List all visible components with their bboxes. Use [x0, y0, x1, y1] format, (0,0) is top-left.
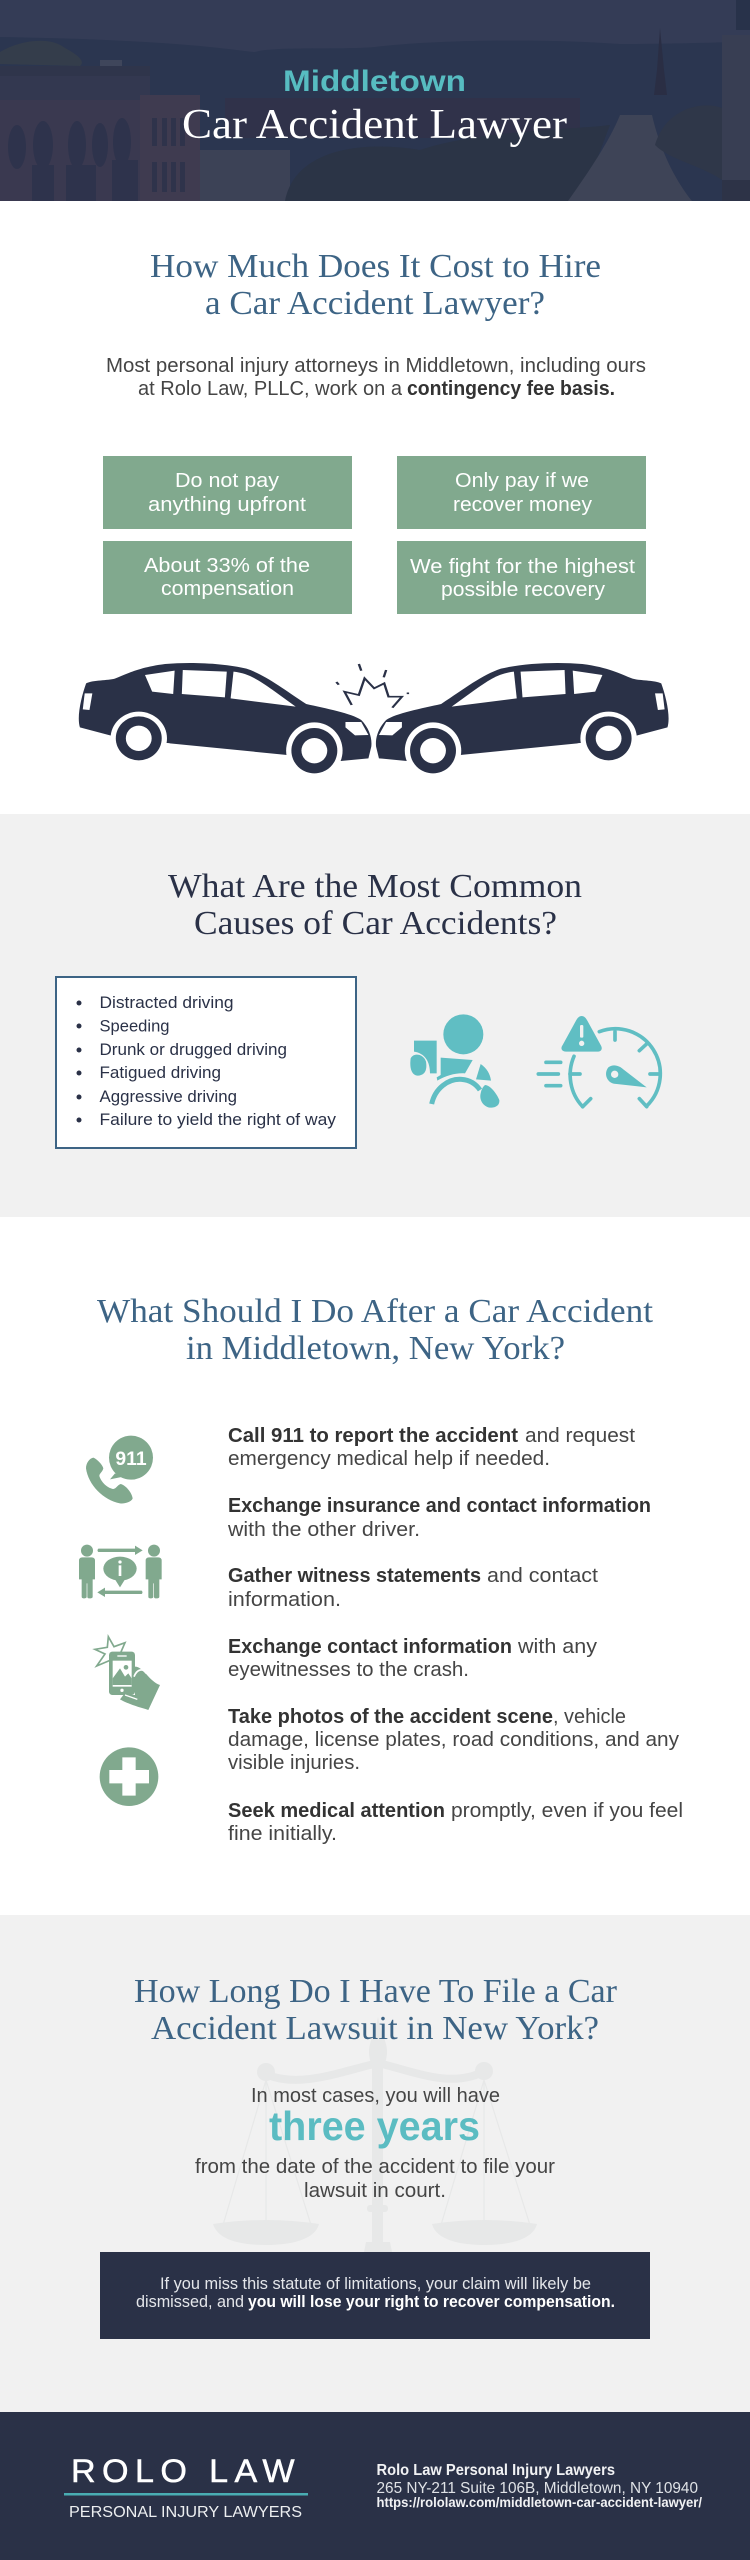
icon: distracted driver [410, 1014, 499, 1108]
heading: cost: How Much Does It Cost to Hire [150, 248, 601, 285]
step text list [227, 1425, 683, 1845]
heading: causes: Causes of Car Accidents? [194, 905, 557, 942]
text: three years statement: In most cases, you will have [251, 2085, 500, 2107]
step: gather witness statements: information. [228, 1589, 341, 1611]
heading: steps: in Middletown, New York? [186, 1330, 565, 1367]
step: exchange insurance [227, 1495, 651, 1541]
box: about 33 percent [103, 541, 352, 614]
heading: filing deadline [134, 1973, 618, 2047]
step: take photos: visible injuries. [228, 1752, 360, 1774]
step: call 911: and request [525, 1425, 635, 1447]
step: seek medical attention: Seek medical attention [228, 1800, 445, 1822]
box: only pay if we recover: recover money [453, 494, 592, 516]
icon: phone photo [95, 1637, 160, 1710]
box: highest possible recovery [397, 541, 646, 614]
hero banner [0, 0, 750, 201]
step: gather witness statements: Gather witness statements [228, 1565, 481, 1587]
text: three years statement: lawsuit in court. [304, 2180, 446, 2202]
box: about 33 percent: compensation [161, 578, 294, 600]
intro paragraph: at Rolo Law, PLLC, work on a [138, 378, 403, 400]
box: highest possible recovery: possible recovery [441, 579, 605, 601]
callout: statute warning: dismissed, and [136, 2293, 244, 2311]
panel: causes list [56, 977, 356, 1148]
watermark: scales of justice [213, 2017, 537, 2252]
illustration: two cars colliding [79, 663, 669, 779]
hero title: Car Accident Lawyer [182, 102, 567, 148]
highlight: three years: three years [269, 2103, 480, 2149]
step: take photos: Take photos of the accident scene [228, 1706, 553, 1728]
box: about 33 percent: About 33% of the [144, 555, 310, 577]
step: call 911: emergency medical help if needed. [228, 1448, 550, 1470]
icon: crash spark [336, 664, 409, 708]
contact details: Rolo Law Personal Injury Lawyers [376, 2462, 615, 2479]
callout: statute warning: If you miss this statute of limitations, your claim will likely be [160, 2275, 591, 2293]
icon: medical cross [100, 1747, 158, 1806]
panel: causes list: Distracted driving [100, 993, 234, 1012]
icon: exchange information [79, 1545, 162, 1598]
step: take photos: , vehicle [553, 1706, 626, 1728]
intro paragraph: Most personal injury attorneys in Middletown, including ours [106, 355, 646, 377]
heading: filing deadline: How Long Do I Have To File a Car [134, 1973, 618, 2010]
heading: steps: What Should I Do After a Car Accident [97, 1293, 654, 1330]
text: three years statement: from the date of the accident to file your [195, 2156, 555, 2178]
section background: steps [0, 1217, 750, 1915]
callout: statute warning [100, 2252, 650, 2339]
contact details [376, 2462, 702, 2510]
contact details: https://rololaw.com/middletown-car-accident-lawyer/ [376, 2494, 702, 2510]
panel: causes list: Drunk or drugged driving [100, 1040, 287, 1059]
box: only pay if we recover [397, 456, 646, 529]
step: call 911: Call 911 to report the accident [228, 1425, 518, 1447]
box: do not pay upfront: Do not pay [175, 470, 279, 492]
step: exchange contact information: eyewitnesses to the crash. [228, 1659, 469, 1681]
heading: filing deadline: Accident Lawsuit in New York? [151, 2010, 599, 2047]
logo: Rolo Law [64, 2453, 308, 2521]
box: only pay if we recover: Only pay if we [455, 470, 589, 492]
panel: causes list: Fatigued driving [100, 1063, 221, 1082]
panel: causes list: Speeding [100, 1016, 170, 1036]
contact details: 265 NY-211 Suite 106B, Middletown, NY 10940 [376, 2480, 698, 2497]
step: exchange contact information: Exchange contact information [228, 1636, 512, 1658]
icon: speeding gauge [538, 1016, 660, 1107]
section background: filing deadline [0, 1915, 750, 2412]
intro paragraph [106, 355, 646, 400]
heading: steps [97, 1293, 654, 1367]
logo: Rolo Law: PERSONAL INJURY LAWYERS [69, 2504, 302, 2521]
icon: 911 call [86, 1436, 153, 1503]
step: gather witness statements: and contact [487, 1565, 598, 1587]
footer [0, 2412, 750, 2560]
callout: statute warning: you will lose your right to recover compensation. [248, 2293, 615, 2311]
panel: causes list: Aggressive driving [100, 1087, 237, 1106]
heading: causes [168, 868, 582, 942]
step: take photos [228, 1706, 679, 1774]
icon: 911 call: 911 [115, 1449, 147, 1470]
section background: causes [0, 814, 750, 1217]
heading: causes: What Are the Most Common [168, 868, 582, 905]
section background: cost [0, 201, 750, 814]
step: exchange insurance: Exchange insurance and contact information [228, 1495, 651, 1517]
text: three years statement [195, 2085, 555, 2202]
step: take photos: damage, license plates, road conditions, and any [228, 1729, 679, 1751]
panel: causes list: Failure to yield the right of way [100, 1110, 337, 1129]
step: exchange contact information: with any [517, 1636, 597, 1658]
box: highest possible recovery: We fight for the highest [410, 556, 635, 578]
step: seek medical attention: promptly, even if you feel [451, 1800, 683, 1822]
step: seek medical attention [228, 1800, 683, 1845]
hero title city: Middletown [283, 65, 466, 98]
intro paragraph: contingency fee basis. [407, 378, 615, 400]
heading: cost: a Car Accident Lawyer? [205, 285, 545, 322]
box: do not pay upfront [103, 456, 352, 529]
step: gather witness statements [228, 1565, 598, 1611]
step: exchange contact information [228, 1636, 597, 1681]
step: exchange insurance: with the other driver. [227, 1519, 420, 1541]
step: seek medical attention: fine initially. [228, 1823, 337, 1845]
heading: cost [150, 248, 601, 322]
step: call 911 [228, 1425, 635, 1470]
logo: Rolo Law: ROLO LAW [71, 2453, 301, 2489]
box: do not pay upfront: anything upfront [148, 494, 306, 516]
